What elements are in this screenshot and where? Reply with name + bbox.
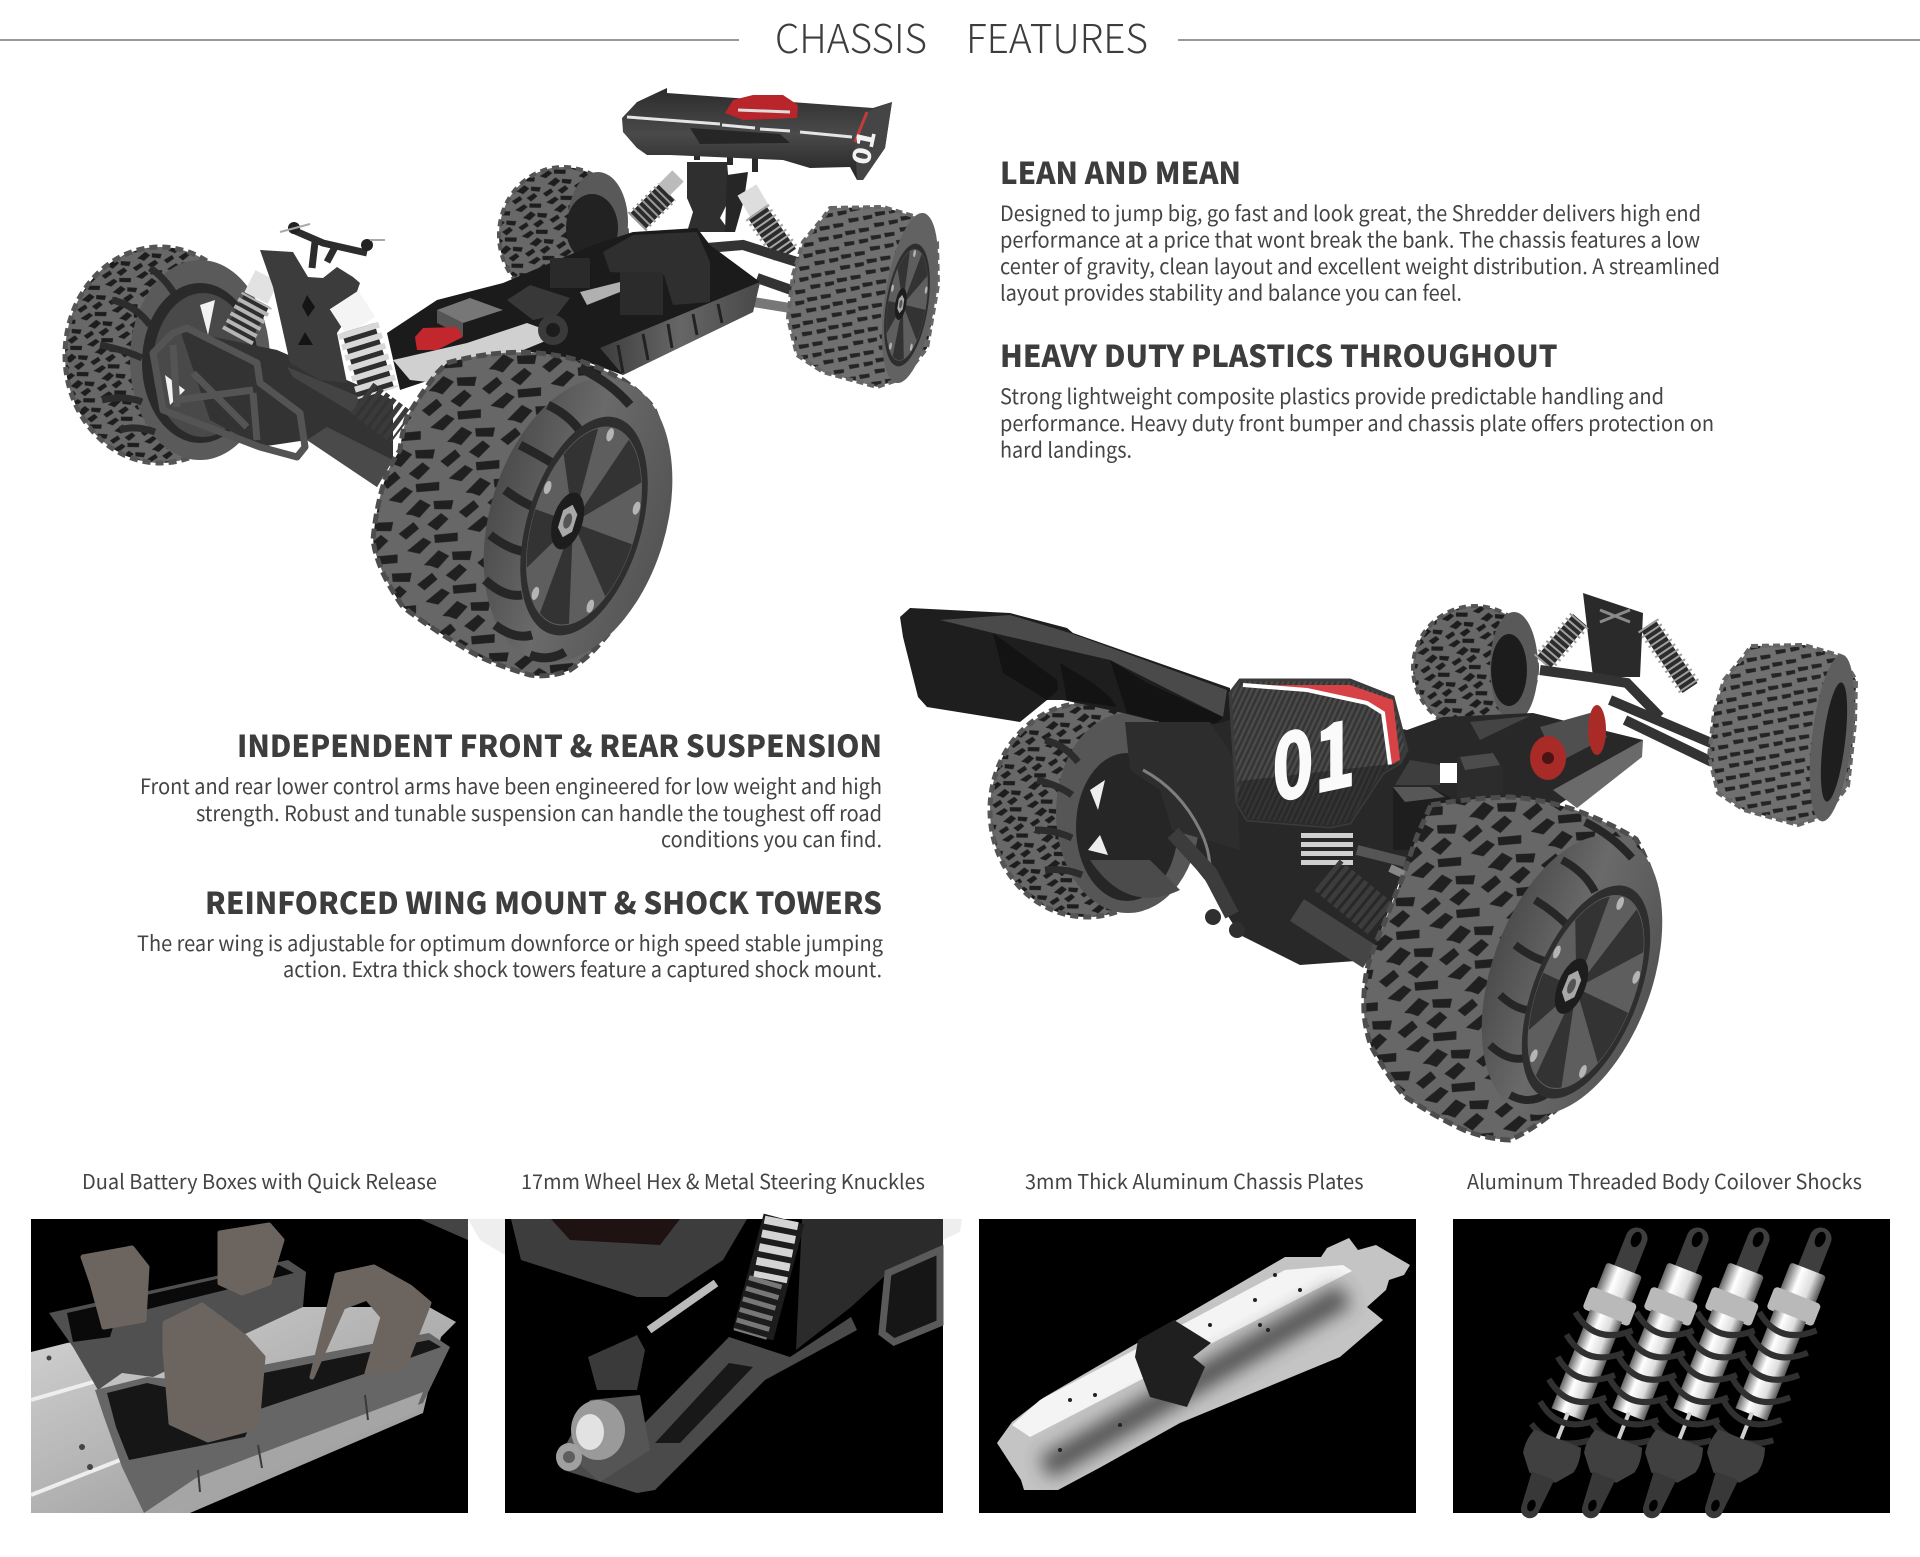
truck illustration: rear view chassis [900, 593, 1862, 1140]
front bumper [153, 328, 305, 457]
center brace [1135, 1320, 1211, 1407]
text block: lean and mean: Designed to jump big, go fast and look great, the Shredder delivers high end [1000, 198, 1701, 228]
panel: wheel hex and knuckles [505, 1219, 943, 1513]
caption: battery boxes: Dual Battery Boxes with Quick Release [82, 1165, 437, 1195]
far rear wheel [1413, 606, 1538, 730]
text block: independent suspension: conditions you can find. [661, 824, 882, 854]
caption: shocks: Aluminum Threaded Body Coilover Shocks [1467, 1165, 1862, 1195]
rear coil [1301, 833, 1353, 866]
near left wheel [990, 703, 1200, 917]
text block: independent suspension: strength. Robust and tunable suspension can handle the toughest off road [196, 798, 882, 828]
text block: lean and mean [1000, 149, 1720, 308]
front shock left [237, 276, 267, 337]
caption: chassis plates: 3mm Thick Aluminum Chassis Plates [1025, 1165, 1364, 1195]
panel: battery boxes [31, 1219, 468, 1513]
rear shock tower [637, 148, 797, 308]
text block: lean and mean: LEAN AND MEAN [1000, 149, 1241, 193]
rear wing: 01 [842, 127, 884, 168]
aluminum plate [393, 323, 560, 384]
text block: lean and mean: center of gravity, clean layout and excellent weight distribution. A streamlined [1000, 251, 1720, 281]
big near wheel [1364, 797, 1697, 1140]
number plate [1230, 677, 1407, 830]
battery straps [83, 1225, 429, 1440]
rear left wheel [499, 167, 628, 303]
red motor [415, 327, 463, 350]
aluminum plate [31, 1307, 456, 1513]
panel: coilover shocks [1453, 1217, 1890, 1529]
number plate: 01 [1272, 677, 1356, 830]
text block: independent suspension: INDEPENDENT FRONT & REAR SUSPENSION [237, 722, 882, 766]
text block: lean and mean: performance at a price that wont break the bank. The chassis features a low [1000, 225, 1700, 255]
lower arm [563, 1317, 857, 1493]
text block: reinforced wing mount: REINFORCED WING MOUNT & SHOCK TOWERS [205, 879, 882, 923]
steering knuckle [556, 1395, 650, 1482]
text block: heavy duty plastics: Strong lightweight composite plastics provide predictable handling and [1000, 381, 1664, 411]
front shock tower [260, 222, 385, 383]
text block: lean and mean: layout provides stability and balance you can feel. [1000, 278, 1462, 308]
chassis tub [387, 228, 760, 390]
front left wheel [65, 247, 270, 463]
text block: reinforced wing mount [137, 879, 883, 984]
title: FEATURES [966, 7, 1148, 65]
front shock right [344, 300, 402, 428]
right rear wheel [788, 207, 948, 387]
text block: heavy duty plastics [1000, 332, 1714, 464]
battery blocks [1457, 753, 1503, 797]
chassis plate [997, 1238, 1410, 1490]
title: CHASSIS [775, 7, 927, 65]
title [775, 7, 1148, 65]
panel: aluminum plates [979, 1219, 1416, 1513]
chassis center [1140, 690, 1643, 965]
wing [900, 608, 1245, 938]
exhaust tubes [1205, 909, 1221, 925]
text block: reinforced wing mount: The rear wing is adjustable for optimum downforce or high speed stable jumping [137, 928, 883, 958]
far right wheel [1709, 645, 1862, 825]
text block: heavy duty plastics: performance. Heavy duty front bumper and chassis plate offers protection on [1000, 408, 1714, 438]
front big wheel [373, 352, 705, 685]
front suspension core [180, 330, 393, 487]
text block: heavy duty plastics: hard landings. [1000, 434, 1132, 464]
rear wing [622, 88, 892, 180]
front battery box [95, 1333, 450, 1513]
text block: reinforced wing mount: action. Extra thick shock towers feature a captured shock mount. [283, 954, 882, 984]
caption: wheel hex: 17mm Wheel Hex & Metal Steering Knuckles [521, 1165, 925, 1195]
rear battery box [49, 1260, 306, 1390]
text block: independent suspension: Front and rear lower control arms have been engineered for low weight and high [140, 771, 882, 801]
truck illustration: top view chassis [65, 88, 948, 685]
coil shock [750, 1219, 784, 1335]
rear tower and shocks [1540, 593, 1716, 762]
text block: independent suspension [140, 722, 882, 854]
text block: heavy duty plastics: HEAVY DUTY PLASTICS THROUGHOUT [1000, 332, 1558, 376]
motor [1540, 713, 1607, 763]
